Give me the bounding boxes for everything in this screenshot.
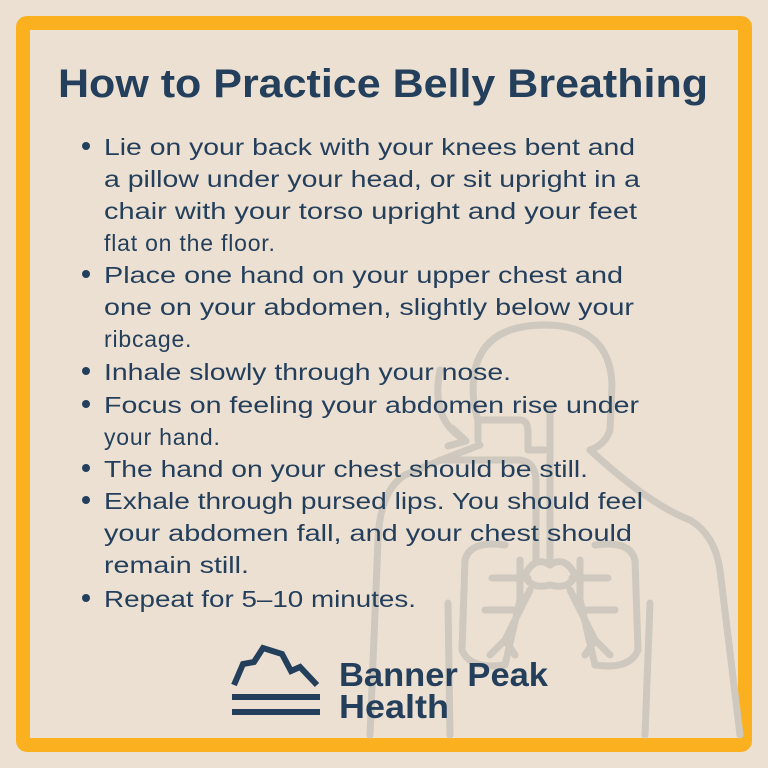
bullet 1: a pillow under your head, or sit upright in a bbox=[104, 166, 640, 192]
bullet 1 bbox=[82, 134, 640, 256]
logo: Banner Peak Health bbox=[232, 648, 549, 725]
icon: mountain bbox=[232, 648, 320, 715]
bullet list bbox=[82, 134, 643, 612]
bullet 4 bbox=[82, 392, 639, 450]
bullet 2 bbox=[82, 262, 634, 352]
bullet 6: Exhale through pursed lips. You should feel bbox=[104, 488, 643, 514]
logo text bbox=[339, 656, 549, 725]
bullet 4: Focus on feeling your abdomen rise under bbox=[104, 392, 639, 418]
bullet 4: your hand. bbox=[104, 424, 221, 450]
bullet 6 bbox=[82, 488, 643, 578]
bullet 6: remain still. bbox=[104, 552, 249, 578]
bullet 2: Place one hand on your upper chest and bbox=[104, 262, 623, 288]
bullet 3: Inhale slowly through your nose. bbox=[104, 359, 511, 385]
bullet 2: one on your abdomen, slightly below your bbox=[104, 294, 634, 320]
bullet 6: your abdomen fall, and your chest should bbox=[104, 520, 632, 546]
title: How to Practice Belly Breathing bbox=[58, 62, 708, 106]
bullet 1: flat on the floor. bbox=[104, 230, 276, 256]
bullet 2: ribcage. bbox=[104, 326, 192, 352]
bullet 5: The hand on your chest should be still. bbox=[104, 456, 588, 482]
illustration: body outline with lungs bbox=[370, 325, 740, 735]
bullet 7: Repeat for 5–10 minutes. bbox=[104, 586, 416, 612]
logo text: Banner Peak bbox=[339, 656, 549, 693]
bullet 1: Lie on your back with your knees bent and bbox=[104, 134, 635, 160]
bullet 1: chair with your torso upright and your feet bbox=[104, 198, 638, 224]
logo text: Health bbox=[339, 688, 449, 725]
